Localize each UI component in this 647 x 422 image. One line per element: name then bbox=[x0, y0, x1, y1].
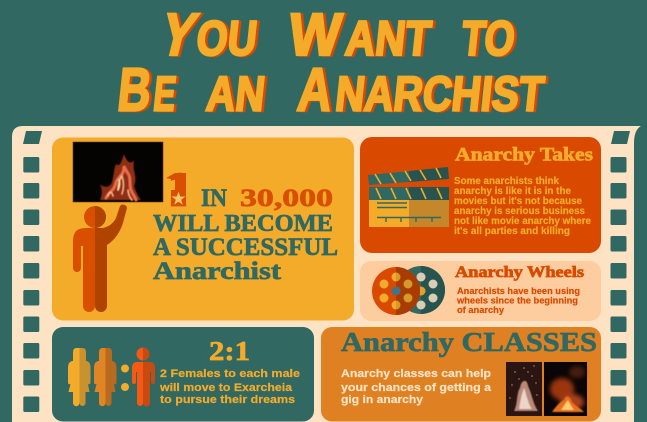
panel: anarchy classes bbox=[321, 327, 601, 422]
fire photo: right bbox=[544, 362, 587, 416]
icon: clapperboard bbox=[368, 167, 449, 227]
male bbox=[132, 348, 155, 406]
fire photo: left bbox=[506, 362, 542, 416]
title: B bbox=[115, 56, 155, 123]
body text bbox=[341, 368, 492, 406]
stat: 1 in 30,000 will become a successful anarchist: Anarchist bbox=[153, 258, 282, 285]
body text: Anarchists have been using bbox=[457, 286, 580, 297]
body text bbox=[456, 286, 580, 316]
panel: 1 in 30,000 bbox=[52, 138, 354, 320]
body text bbox=[159, 368, 300, 406]
title: A bbox=[295, 56, 336, 123]
title: NARCHIST bbox=[333, 68, 547, 121]
body text bbox=[454, 176, 591, 237]
stat: 1 in 30,000 will become a successful anarchist: IN bbox=[201, 185, 227, 212]
body text: anarchy is like it is in the bbox=[454, 186, 571, 197]
body text: anarchy is serious business bbox=[454, 206, 585, 217]
body text: 2 Females to each male bbox=[160, 368, 300, 380]
female one bbox=[68, 348, 90, 406]
body text: it's all parties and killing bbox=[454, 226, 570, 237]
film strip bbox=[12, 126, 641, 422]
female two bbox=[94, 348, 116, 406]
stat: 1 in 30,000 will become a successful anarchist: 30,000 bbox=[240, 185, 333, 212]
body text: wheels since the beginning bbox=[456, 296, 578, 306]
stat: 1 in 30,000 will become a successful anarchist bbox=[153, 161, 338, 285]
icon: film reels bbox=[372, 266, 445, 315]
body text: Anarchy classes can help bbox=[341, 368, 491, 380]
body text: Some anarchists think bbox=[454, 176, 559, 187]
title: AN bbox=[204, 68, 268, 121]
heading: Anarchy CLASSES bbox=[341, 327, 597, 357]
numeral one with star: 1 bbox=[168, 161, 188, 217]
body text: movies but it's not because bbox=[454, 196, 582, 207]
body text: your chances of getting a bbox=[341, 382, 492, 394]
title bbox=[115, 1, 547, 123]
panel: anarchy takes bbox=[360, 137, 601, 253]
person with raised arm bbox=[73, 205, 127, 312]
title: OU bbox=[194, 12, 260, 66]
panel: 2 to 1 ratio bbox=[52, 327, 314, 422]
body text: of anarchy bbox=[457, 305, 505, 316]
body text: gig in anarchy bbox=[341, 394, 424, 406]
body text: to pursue their dreams bbox=[160, 394, 295, 406]
stat: 1 in 30,000 will become a successful anarchist: A SUCCESSFUL bbox=[153, 234, 338, 261]
title: W bbox=[286, 1, 345, 68]
body text: will move to Exarcheia bbox=[159, 382, 293, 394]
fire photo bbox=[73, 142, 163, 202]
heading: Anarchy Takes bbox=[455, 144, 593, 166]
stat: 1 in 30,000 will become a successful anarchist: WILL BECOME bbox=[153, 211, 333, 237]
title: E bbox=[151, 68, 179, 121]
ratio number: 2:1 bbox=[209, 336, 250, 366]
heading: Anarchy Wheels bbox=[455, 264, 584, 281]
ratio dots bbox=[121, 364, 129, 391]
body text: not like movie anarchy where bbox=[454, 216, 591, 227]
panel: anarchy wheels bbox=[360, 261, 601, 321]
title: ANT bbox=[343, 12, 434, 66]
icon: females and male bbox=[68, 348, 155, 406]
title: Y bbox=[154, 1, 204, 68]
title: TO bbox=[459, 12, 518, 66]
